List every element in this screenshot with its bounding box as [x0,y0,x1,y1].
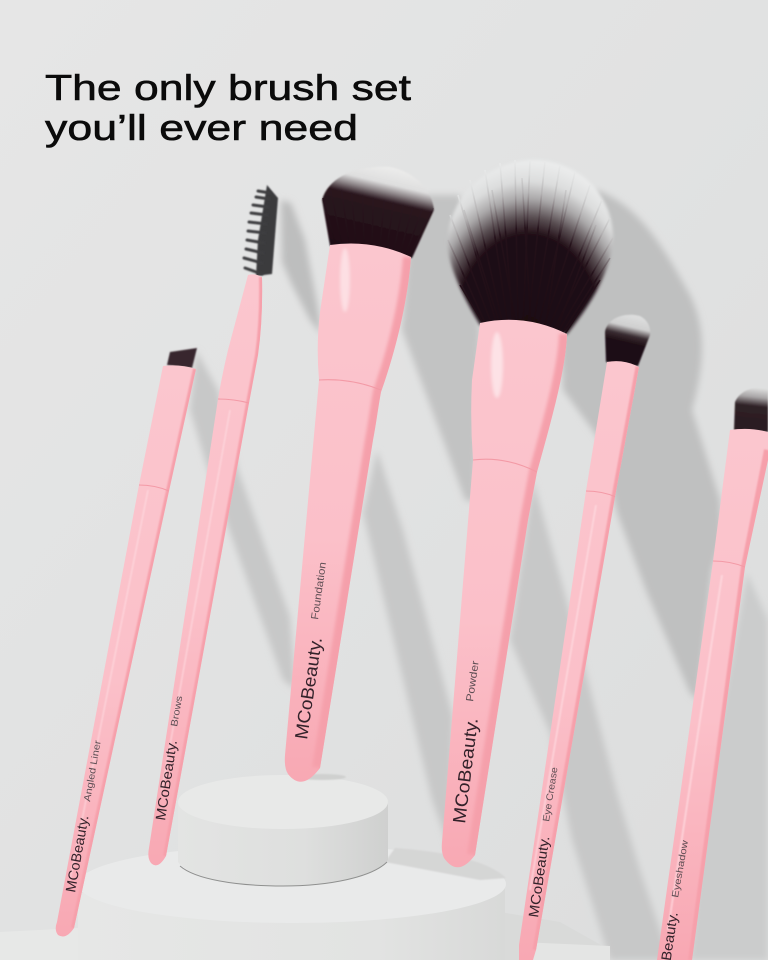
brush: Foundation [280,167,434,785]
floor blocks [0,912,610,960]
liner body [50,360,200,940]
eyeshadow bristles [734,388,768,432]
brows body [148,274,262,866]
foundation body [280,235,415,785]
eye crease bristles [605,315,650,366]
title [45,67,411,148]
eyeshadow label text [653,839,691,960]
title: The only brush set [45,67,411,108]
powder label text: Powder [464,660,482,702]
eye crease label text: Eye Crease [541,766,561,822]
brows label text: MCoBeauty. [152,739,180,821]
brush: Angled Liner [50,348,200,940]
brush: Powder [435,160,613,875]
foundation label text: Foundation [309,561,329,620]
eye crease body [515,358,641,960]
powder label text: MCoBeauty. [449,717,482,824]
brush: Eyeshadow [653,388,768,960]
eyeshadow body [655,425,768,960]
brush: Brows [140,185,278,870]
powder label text [449,660,482,824]
small pedestal [178,774,388,886]
brows label text: Brows [169,695,185,728]
foundation bristles [322,167,434,258]
title: you’ll ever need [45,107,358,148]
liner bristles [167,348,197,368]
foundation label text: MCoBeauty. [291,636,326,741]
eye crease label text [525,766,561,918]
large pedestal [78,845,506,960]
foundation label text [291,561,329,741]
powder bristles [448,160,613,334]
spoolie bristles [244,185,278,276]
brows label text [152,695,185,821]
liner label text [62,740,104,894]
powder body [435,310,570,875]
liner label text: MCoBeauty. [62,814,91,894]
brush: Eye Crease [515,315,650,960]
liner label text: Angled Liner [82,740,104,803]
eye crease label text: MCoBeauty. [525,835,552,918]
cast shadows on wall [190,190,768,960]
eyeshadow label text: Eyeshadow [670,839,691,899]
